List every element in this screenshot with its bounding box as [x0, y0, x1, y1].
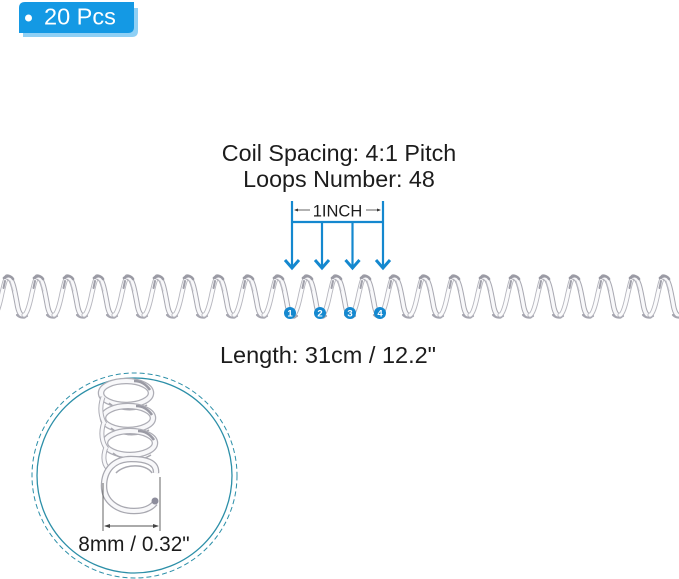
length label: Length: 31cm / 12.2" — [220, 342, 436, 368]
numbered loop markers: 4 — [377, 308, 383, 320]
badge: 20 Pcs: 20 Pcs — [44, 4, 116, 30]
plastic spiral coil — [0, 276, 679, 318]
coil close-up — [101, 381, 158, 511]
heading: coil spacing: Coil Spacing: 4:1 Pitch — [222, 140, 456, 166]
detail circle: coil diameter — [32, 373, 237, 578]
1 inch pitch diagram with arrows — [285, 201, 390, 268]
numbered loop markers: 2 — [317, 308, 323, 320]
diameter dimension — [103, 477, 160, 531]
numbered loop markers — [284, 307, 386, 320]
numbered loop markers: 3 — [347, 308, 353, 320]
1 inch pitch diagram with arrows: 1INCH — [313, 202, 362, 220]
heading: loops number: Loops Number: 48 — [243, 166, 435, 192]
badge: 20 Pcs — [19, 2, 138, 37]
numbered loop markers: 1 — [287, 308, 293, 320]
diameter label: 8mm / 0.32" — [78, 533, 190, 556]
